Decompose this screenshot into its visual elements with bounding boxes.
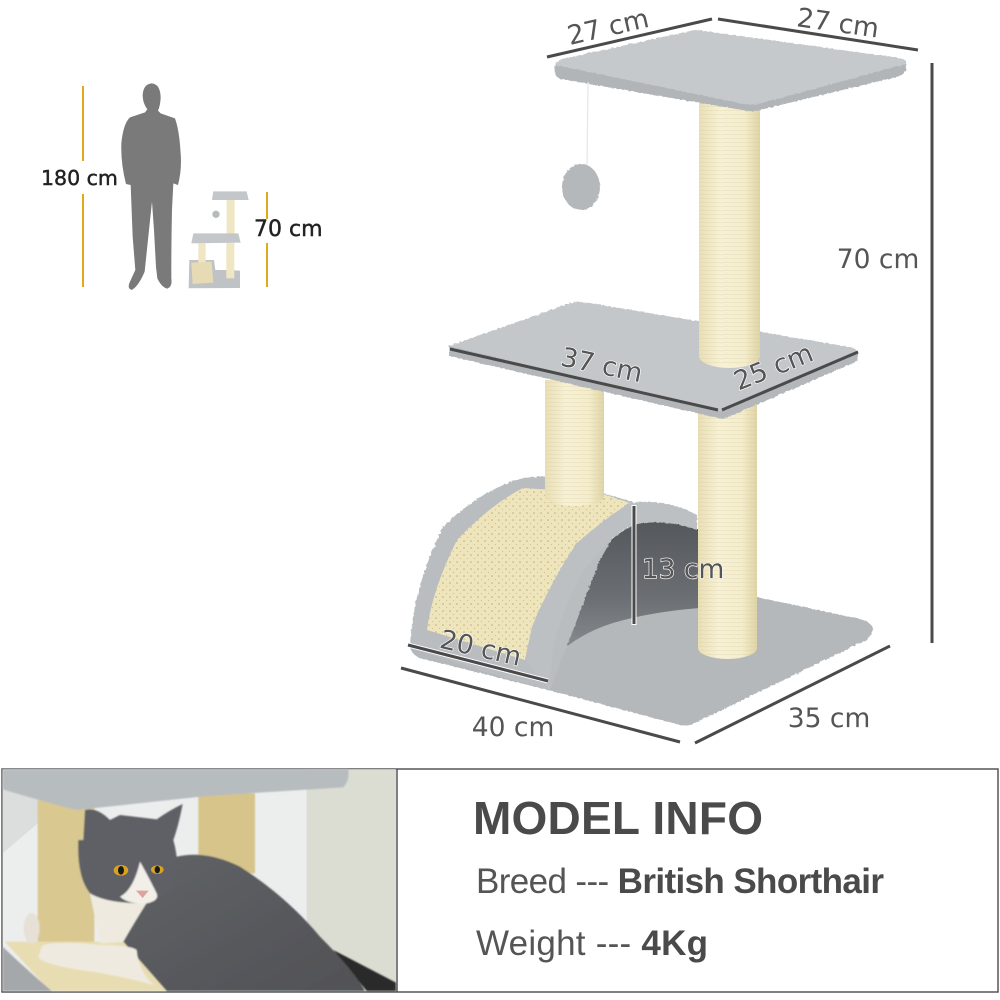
top platform [555,30,906,111]
sisal scratching panel [427,488,630,660]
dimension: 40 cm: 40 cm [472,712,554,743]
dimension: 13 cm [634,505,724,625]
dimension: 37 cm [450,342,718,410]
human silhouette [121,83,181,290]
dimension: 35 cm: 35 cm [788,703,870,734]
size comparison [41,83,323,290]
breed: Breed --- British Shorthair [476,862,884,901]
dimension: height 70 cm: 70 cm [837,244,919,275]
tunnel interior [552,521,700,660]
dimension: 37 cm: 37 cm [558,342,645,389]
dimension: 40 cm [401,668,680,743]
70 cm marker [254,192,323,287]
divider [396,769,398,992]
heading: MODEL INFO [473,792,763,844]
dimension: 35 cm [695,646,890,743]
hanging string [587,82,588,166]
dimension: 20 cm [408,624,548,681]
dimension: top left 27 cm: 27 cm [564,3,652,52]
dimension: 20 cm: 20 cm [437,624,524,673]
tall post lower [698,400,757,659]
arch front rim [525,502,697,690]
cat photo [3,769,396,991]
dimension: 25 cm [722,338,858,410]
pompom toy [562,164,600,210]
weight: Weight --- 4Kg [476,924,708,963]
dimension: top right 27 cm: 27 cm [795,2,881,45]
180 cm marker: 180 cm [41,166,118,190]
dimension: 13 cm: 13 cm [642,554,724,585]
short post [545,380,604,506]
panel border [2,769,998,992]
arch outer fur [410,476,633,690]
middle platform [449,302,858,419]
tall post upper [699,100,760,368]
dimension: 25 cm: 25 cm [729,338,818,397]
dimension: top right 27 cm [718,2,918,50]
70 cm marker: 70 cm [254,217,323,242]
bottom info panel [2,769,998,992]
base platform [410,580,872,726]
dimension: top left 27 cm [547,3,712,57]
mini cat tree [189,191,249,288]
cat tree product [410,30,906,726]
